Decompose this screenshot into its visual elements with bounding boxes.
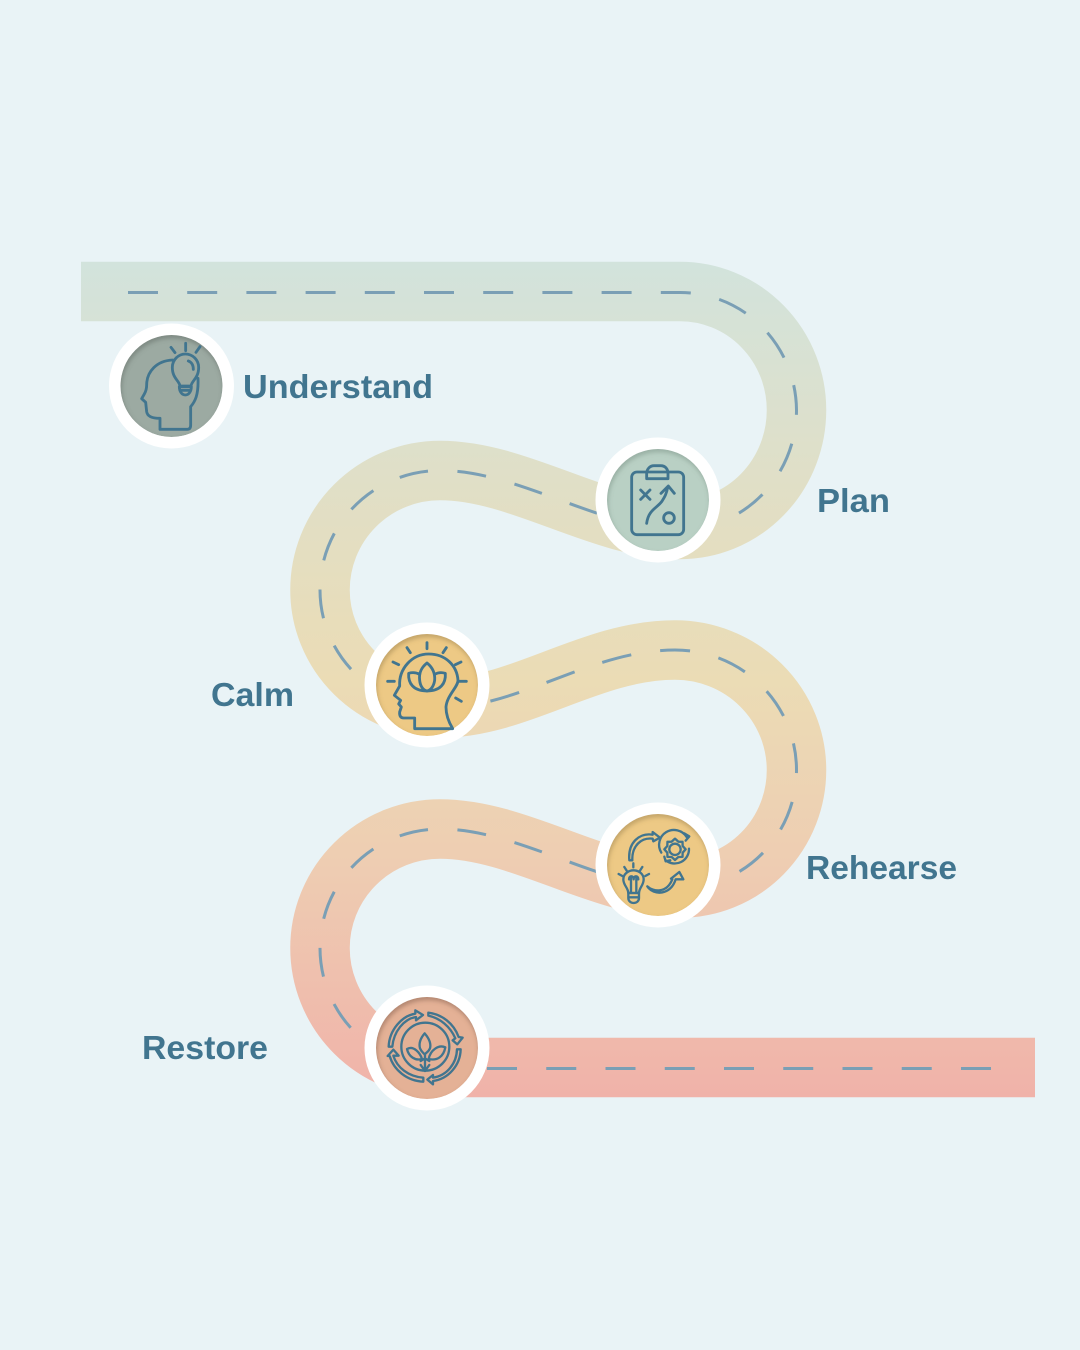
label: Rehearse: Rehearse	[806, 849, 957, 886]
medallion: Plan	[596, 438, 720, 562]
step: Restore	[142, 986, 490, 1110]
label: Plan: Plan	[817, 482, 890, 519]
step: Plan	[596, 438, 890, 562]
icon: clipboard with strategy arrow	[632, 466, 684, 535]
road centre dashes	[128, 292, 991, 1068]
medallion: Restore	[364, 986, 490, 1110]
icon: head with light bulb	[142, 343, 200, 429]
icon: bulb, gear and cycle arrows	[619, 830, 689, 903]
label: Calm: Calm	[211, 676, 294, 713]
label: Understand: Understand	[243, 368, 433, 405]
icon: plant in cycle arrows	[388, 1010, 463, 1084]
step: Rehearse	[596, 802, 957, 928]
winding road	[81, 292, 1035, 1068]
medallion: Rehearse	[596, 802, 720, 928]
icon: head with lotus	[388, 643, 466, 729]
step: Calm	[211, 622, 490, 748]
medallion: Calm	[364, 622, 490, 748]
step: Understand	[109, 324, 433, 448]
label: Restore: Restore	[142, 1029, 268, 1066]
medallion: Understand	[109, 324, 234, 448]
